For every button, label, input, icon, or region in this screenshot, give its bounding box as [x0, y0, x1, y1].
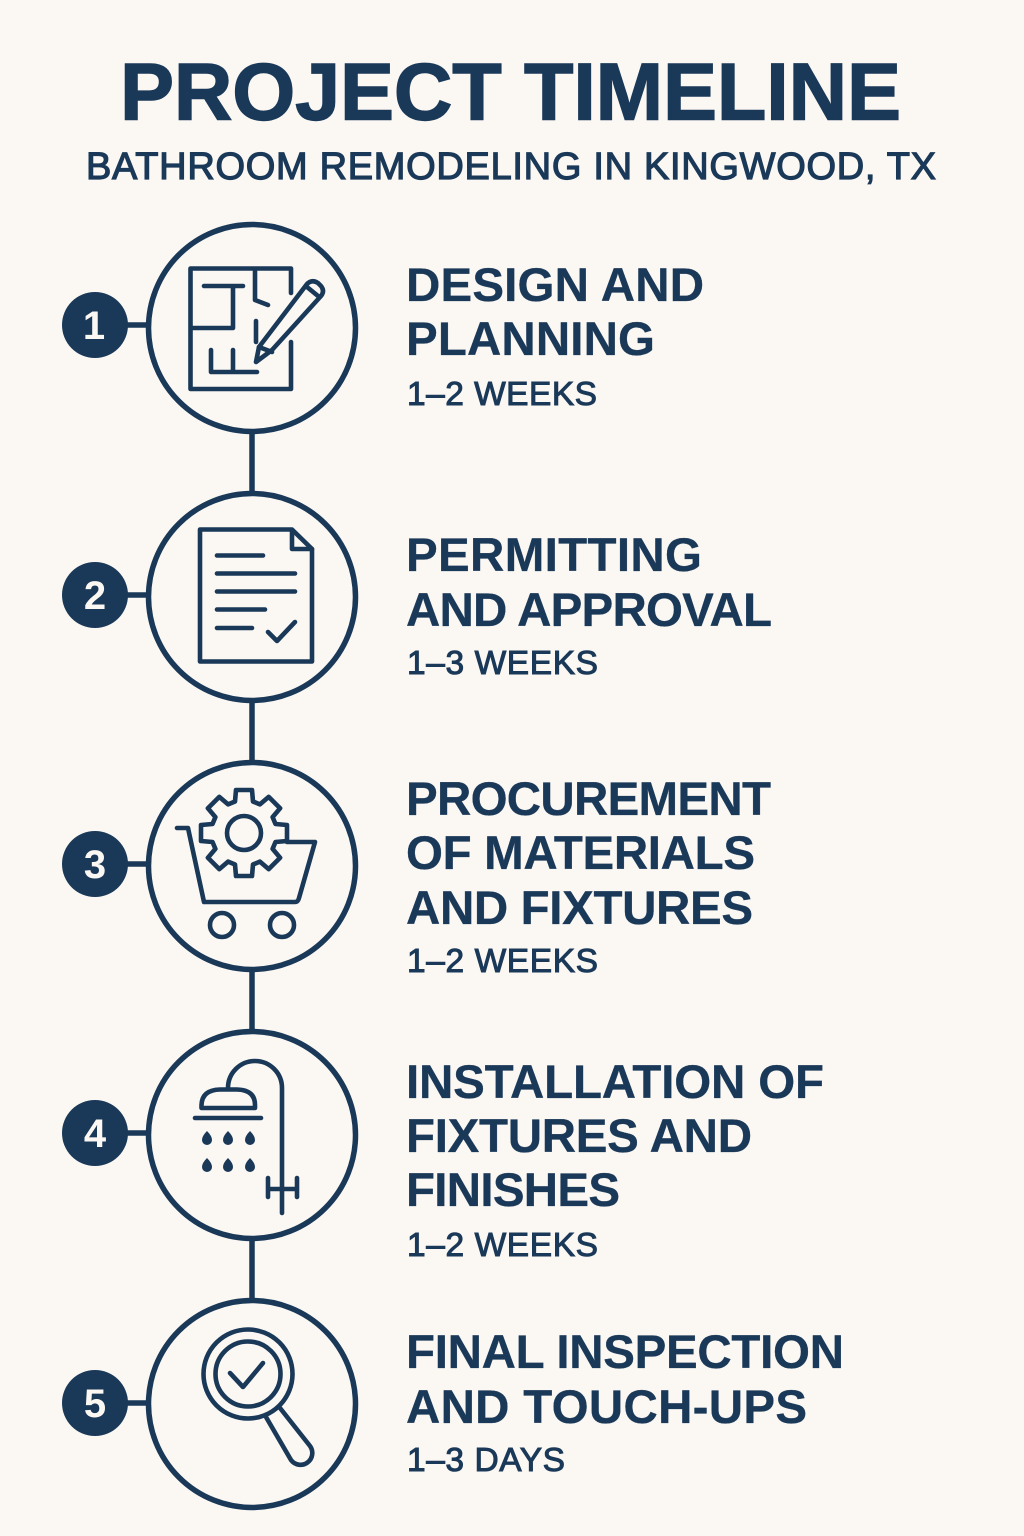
duration: 1-2 weeks: 1–2 WEEKS: [407, 943, 598, 980]
heading: installation of fixtures and finishes: INSTALLATION OF: [406, 1056, 824, 1109]
heading: procurement of materials and fixtures: OF MATERIALS: [406, 827, 755, 880]
step 2: permitting and approval: [62, 494, 772, 700]
connector: step 4 to 5: [249, 1239, 255, 1300]
heading: permitting and approval: PERMITTING: [406, 529, 702, 582]
heading: procurement of materials and fixtures: PROCUREMENT: [406, 773, 771, 826]
number badge 2: [62, 562, 148, 628]
number badge 5: [62, 1370, 148, 1436]
icon: magnifying glass with check: [148, 1300, 356, 1508]
step 1: design and planning: [62, 224, 704, 432]
icon: floor plan and pencil: [148, 224, 356, 432]
heading: design and planning: [406, 259, 704, 366]
heading: installation of fixtures and finishes: [406, 1056, 824, 1217]
duration: 1-2 weeks: 1–2 WEEKS: [407, 376, 597, 413]
step 4: installation: [62, 1032, 824, 1264]
number badge 5: 5: [84, 1382, 106, 1426]
number badge 4: [62, 1100, 148, 1166]
number badge 3: [62, 831, 148, 897]
heading: final inspection and touch-ups: AND TOUCH-UPS: [406, 1381, 807, 1434]
heading: procurement of materials and fixtures: AND FIXTURES: [406, 882, 753, 935]
heading: permitting and approval: AND APPROVAL: [406, 584, 772, 637]
connector: step 2 to 3: [249, 701, 255, 762]
number badge 2: 2: [84, 574, 106, 618]
heading: installation of fixtures and finishes: FIXTURES AND: [406, 1110, 752, 1163]
duration: 1-3 days: 1–3 DAYS: [407, 1442, 565, 1479]
step 5: final inspection: [62, 1300, 844, 1508]
icon: cart with gear: [148, 762, 356, 970]
duration: 1-2 weeks: 1–2 WEEKS: [407, 1227, 598, 1264]
heading: procurement of materials and fixtures: [406, 773, 771, 935]
heading: final inspection and touch-ups: [406, 1326, 844, 1434]
number badge 1: [62, 292, 148, 358]
icon: document with check: [148, 494, 356, 700]
heading: design and planning: PLANNING: [406, 313, 655, 366]
connector: step 1 to 2: [249, 432, 255, 493]
connector: step 3 to 4: [249, 970, 255, 1030]
number badge 4: 4: [84, 1112, 107, 1156]
subtitle: BATHROOM REMODELING IN KINGWOOD, TX: [86, 146, 936, 188]
duration: 1-3 weeks: 1–3 WEEKS: [407, 645, 598, 682]
heading: final inspection and touch-ups: FINAL INSPECTION: [406, 1326, 844, 1379]
heading: installation of fixtures and finishes: FINISHES: [406, 1164, 620, 1217]
heading: permitting and approval: [406, 529, 772, 637]
title: PROJECT TIMELINE: [120, 48, 901, 138]
step 3: procurement: [62, 762, 771, 980]
heading: design and planning: DESIGN AND: [406, 259, 704, 312]
number badge 1: 1: [83, 304, 105, 348]
number badge 3: 3: [84, 843, 106, 887]
icon: shower: [148, 1032, 356, 1238]
